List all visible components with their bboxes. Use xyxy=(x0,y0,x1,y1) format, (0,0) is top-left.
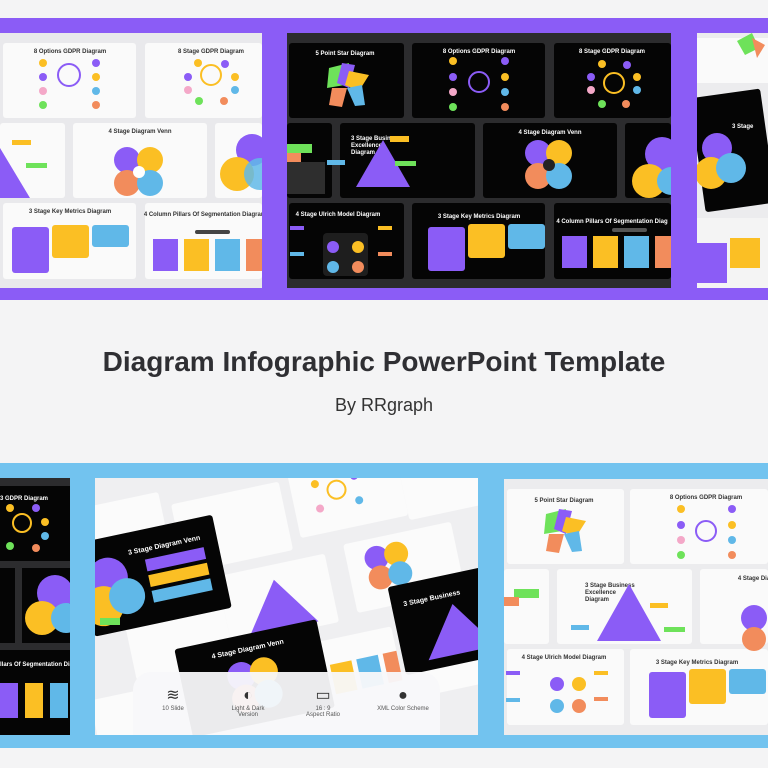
feature: aspect ratio xyxy=(306,687,340,718)
feature: light dark: Version xyxy=(238,712,258,718)
title: Diagram Infographic PowerPoint Template xyxy=(103,346,665,377)
panel: right partial xyxy=(697,33,768,288)
feature: aspect ratio: Aspect Ratio xyxy=(306,712,340,718)
panel: light slides right: Diagram xyxy=(585,597,609,603)
panel: dark slides center: 4 Column Pillars Of Segmentation Diag xyxy=(556,219,668,225)
subtitle: By RRgraph xyxy=(335,395,433,415)
feature: light dark: ◐ xyxy=(243,687,253,704)
feature: 10 slide xyxy=(162,687,184,712)
panel: dark slides center: 3 Stage Business xyxy=(351,136,401,142)
panel: light slides left: 3 Stage Key Metrics Diagram xyxy=(29,209,111,215)
panel: dark slides center: 8 Stage GDPR Diagram xyxy=(579,49,645,55)
top purple band xyxy=(0,18,768,300)
feature: aspect ratio: 16 : 9 xyxy=(315,706,330,712)
feature: 10 slide: 10 Slide xyxy=(162,706,184,712)
panel: dark slides left xyxy=(0,478,70,735)
panel: tilted collage xyxy=(95,478,478,735)
dark slide: business excellence: 3 Stage Business xyxy=(403,589,461,608)
feature: light dark xyxy=(231,687,264,718)
panel: light slides right: 8 Options GDPR Diagram xyxy=(670,495,742,501)
dark slide: 3 stage venn: 3 Stage Diagram Venn xyxy=(128,535,201,557)
panel: light slides right: 3 Stage Business xyxy=(585,583,635,589)
dark slide: 3 stage venn xyxy=(70,515,232,638)
dark slide: business excellence xyxy=(388,564,514,675)
panel: right partial: 3 Stage xyxy=(732,124,754,130)
feature: 10 slide: ≋ xyxy=(166,687,180,704)
panel: dark slides center: Excellence xyxy=(351,143,383,149)
feature: xml color: ● xyxy=(398,687,408,704)
panel: light slides left xyxy=(0,33,262,288)
dark slide: 4 stage venn: 4 Stage Diagram Venn xyxy=(211,639,284,661)
feature: xml color: XML Color Scheme xyxy=(377,706,429,712)
panel: light slides left: 8 Options GDPR Diagram xyxy=(34,49,106,55)
bottom blue band xyxy=(0,463,768,748)
feature: light dark: Light & Dark xyxy=(231,706,264,712)
panel: light slides right: 3 Stage Key Metrics Diagram xyxy=(656,660,738,666)
panel: dark slides center: Diagram xyxy=(351,150,375,156)
features bar xyxy=(133,672,440,742)
dark slide: 4 stage venn xyxy=(174,619,335,737)
panel: light slides right xyxy=(504,479,768,735)
panel: light slides right: 5 Point Star Diagram xyxy=(534,498,594,504)
feature: xml color xyxy=(377,687,429,712)
panel: dark slides center: 5 Point Star Diagram xyxy=(315,51,375,57)
panel: light slides left: 4 Stage Diagram Venn xyxy=(108,129,172,135)
panel: dark slides left: 3 GDPR Diagram xyxy=(0,496,48,502)
panel: dark slides center: 4 Stage Diagram Venn xyxy=(518,130,582,136)
panel: dark slides center: 8 Options GDPR Diagram xyxy=(443,49,515,55)
panel: dark slides center: 3 Stage Key Metrics Diagram xyxy=(438,214,520,220)
feature: aspect ratio: ▭ xyxy=(315,687,331,704)
panel: dark slides center xyxy=(287,33,671,288)
panel: light slides right: Excellence xyxy=(585,590,617,596)
panel: light slides left: 8 Stage GDPR Diagram xyxy=(178,49,244,55)
panel: dark slides center: 4 Stage Ulrich Model Diagram xyxy=(296,212,380,218)
panel: light slides right: 4 Stage Ulrich Model Diagram xyxy=(522,655,606,661)
